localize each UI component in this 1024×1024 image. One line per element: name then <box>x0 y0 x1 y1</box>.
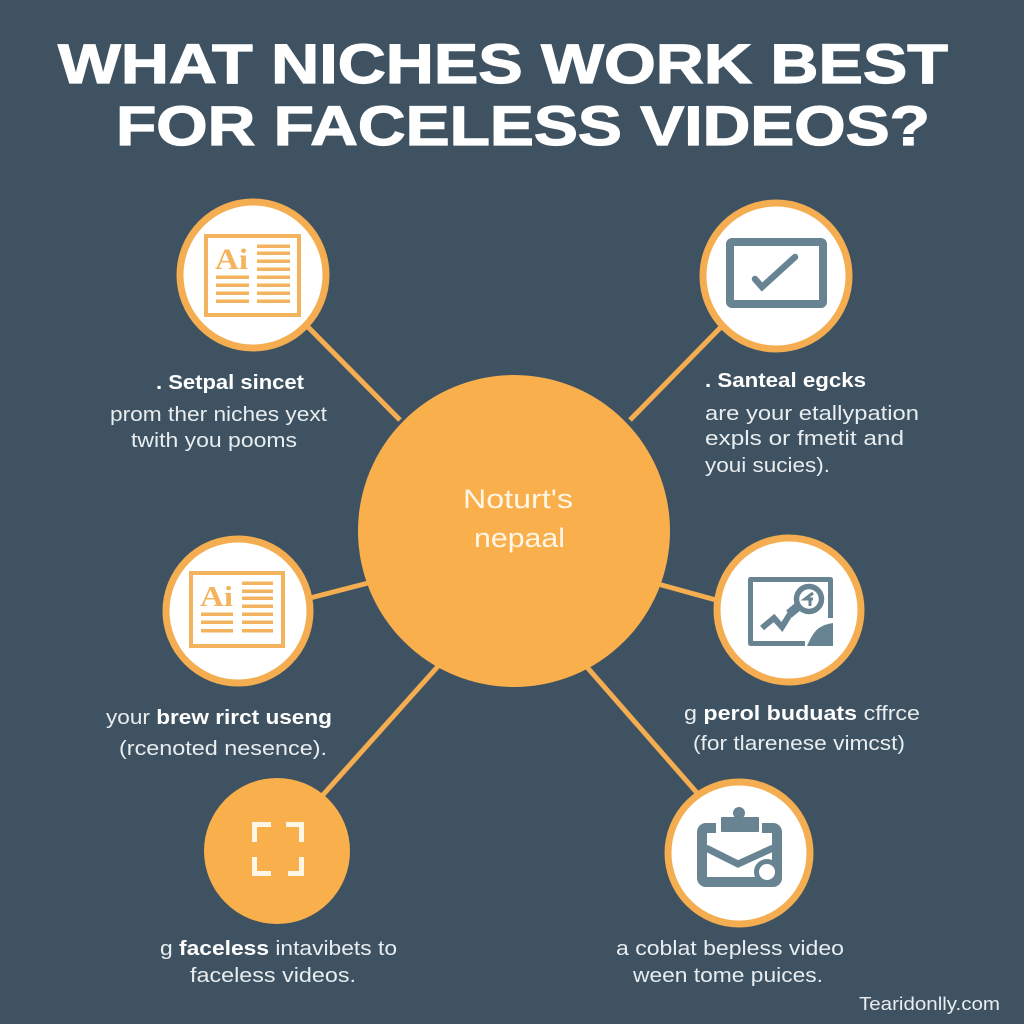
text: bottom right: ween tome puices. <box>632 964 823 987</box>
text: top right: youi sucies). <box>705 454 830 477</box>
text: bottom left <box>160 937 397 987</box>
title: WHAT NICHES WORK BEST <box>58 33 948 95</box>
text: middle left <box>106 706 332 760</box>
text: top left <box>110 371 327 452</box>
text: middle left: (rcenoted nesence). <box>119 737 327 760</box>
text: top right <box>705 369 919 477</box>
connector lines <box>308 326 722 796</box>
icon: chart with magnifier <box>717 538 861 682</box>
icon: focus frame <box>204 778 350 924</box>
text: top left: prom ther niches yext <box>110 403 327 426</box>
watermark: Tearidonlly.com <box>859 994 1000 1014</box>
text: top left: twith you pooms <box>131 429 297 452</box>
text: middle left: your brew rirct useng <box>106 706 332 729</box>
central hub <box>358 375 670 687</box>
title <box>58 33 948 157</box>
central hub: Noturt's <box>463 484 573 514</box>
text: bottom right: a coblat bepless video <box>616 937 844 960</box>
icon: checkmark screen <box>703 203 849 349</box>
text: middle right: (for tlarenese vimcst) <box>693 732 905 755</box>
text: bottom left: faceless videos. <box>190 964 356 987</box>
title: FOR FACELESS VIDEOS? <box>116 95 930 157</box>
text: top right: expls or fmetit and <box>705 427 904 450</box>
icon: document middle left <box>166 539 310 683</box>
icon: document top left: Ai <box>215 243 248 276</box>
text: bottom left: g faceless intavibets to <box>160 937 397 960</box>
text: top right: are your etallypation <box>705 402 919 425</box>
text: middle right: g perol buduats cffrce <box>684 702 920 725</box>
text: bottom right <box>616 937 844 987</box>
text: top left: . Setpal sincet <box>156 371 304 394</box>
icon: document top left <box>180 202 326 348</box>
central hub: nepaal <box>474 523 565 553</box>
icon: document middle left: Ai <box>200 581 233 613</box>
text: middle right <box>684 702 920 755</box>
text: top right: . Santeal egcks <box>705 369 866 392</box>
icon: clipboard envelope <box>668 782 810 924</box>
